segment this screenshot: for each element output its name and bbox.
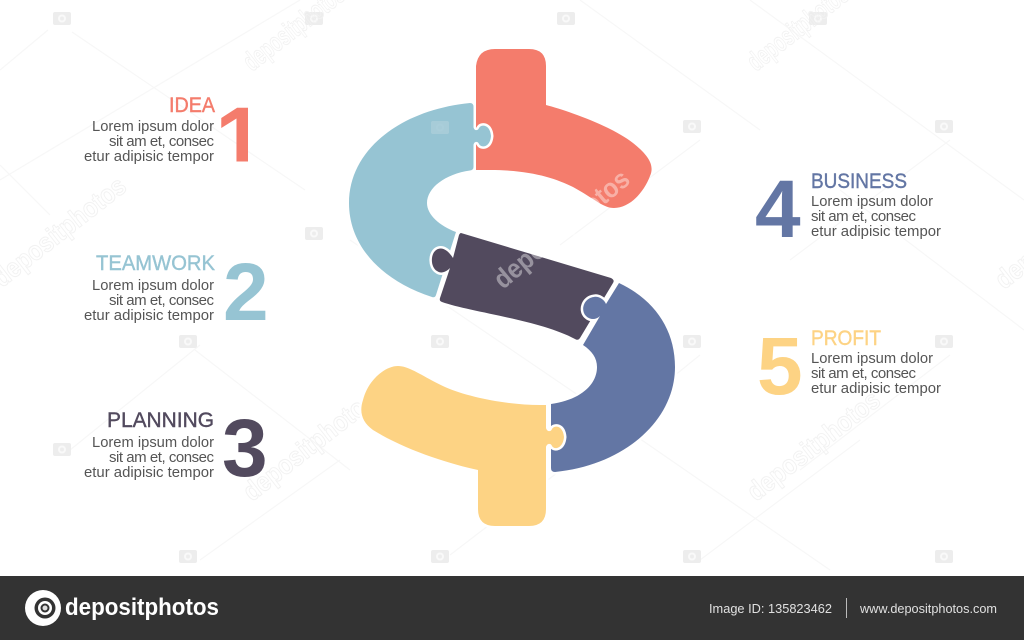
heading: business: BUSINESS [811, 170, 907, 193]
camera mark on light blue piece [431, 121, 449, 134]
puzzle piece 1: red [476, 49, 652, 208]
body text [84, 277, 214, 324]
dollar sign puzzle [349, 49, 675, 526]
item 2: teamwork [84, 247, 269, 338]
body text [84, 118, 214, 165]
puzzle piece 4: steel blue [551, 283, 675, 472]
footer logo icon: camera [25, 590, 61, 626]
body text: etur adipisic tempor [811, 380, 941, 397]
body text [811, 193, 941, 240]
body text [84, 434, 214, 481]
body text: sit am et, consec [109, 292, 214, 309]
footer divider [846, 598, 847, 618]
puzzle piece 5: yellow [361, 366, 564, 526]
number 3: 3 [222, 403, 268, 494]
watermark text: depositphotos [741, 385, 886, 507]
number 1: 1 [215, 89, 266, 191]
watermark text: depositphotos [237, 385, 382, 507]
body text: Lorem ipsum dolor [811, 193, 933, 210]
body text: etur adipisic tempor [84, 148, 214, 165]
number 4: 4 [755, 164, 801, 255]
item 5: profit [757, 321, 941, 412]
item 1: idea [84, 97, 248, 164]
image id: Image ID: 135823462 [709, 602, 832, 616]
puzzle piece 3: dark purple [432, 233, 614, 340]
footer logo text: depositphotos [65, 594, 219, 621]
body text: sit am et, consec [811, 208, 916, 225]
body text: Lorem ipsum dolor [92, 277, 214, 294]
body text: etur adipisic tempor [811, 223, 941, 240]
number 5: 5 [757, 321, 803, 412]
body text: sit am et, consec [109, 133, 214, 150]
heading: planning: PLANNING [107, 409, 214, 432]
body text: etur adipisic tempor [84, 464, 214, 481]
body text: Lorem ipsum dolor [92, 434, 214, 451]
body text: sit am et, consec [109, 449, 214, 466]
item 3: planning [84, 403, 268, 494]
puzzle piece 2: light blue [349, 103, 491, 297]
website url: www.depositphotos.com [859, 602, 997, 616]
heading: profit: PROFIT [811, 327, 881, 350]
body text: sit am et, consec [811, 365, 916, 382]
body text: Lorem ipsum dolor [92, 118, 214, 135]
body text: Lorem ipsum dolor [811, 350, 933, 367]
watermark text [0, 0, 1024, 507]
heading: idea: IDEA [169, 94, 215, 117]
footer bar [0, 576, 1024, 640]
heading: teamwork: TEAMWORK [96, 252, 215, 275]
item 4: business [755, 164, 941, 255]
watermark across dollar sign: depositphotos [488, 164, 636, 295]
body text [811, 350, 941, 397]
body text: etur adipisic tempor [84, 307, 214, 324]
number 2: 2 [223, 247, 269, 338]
